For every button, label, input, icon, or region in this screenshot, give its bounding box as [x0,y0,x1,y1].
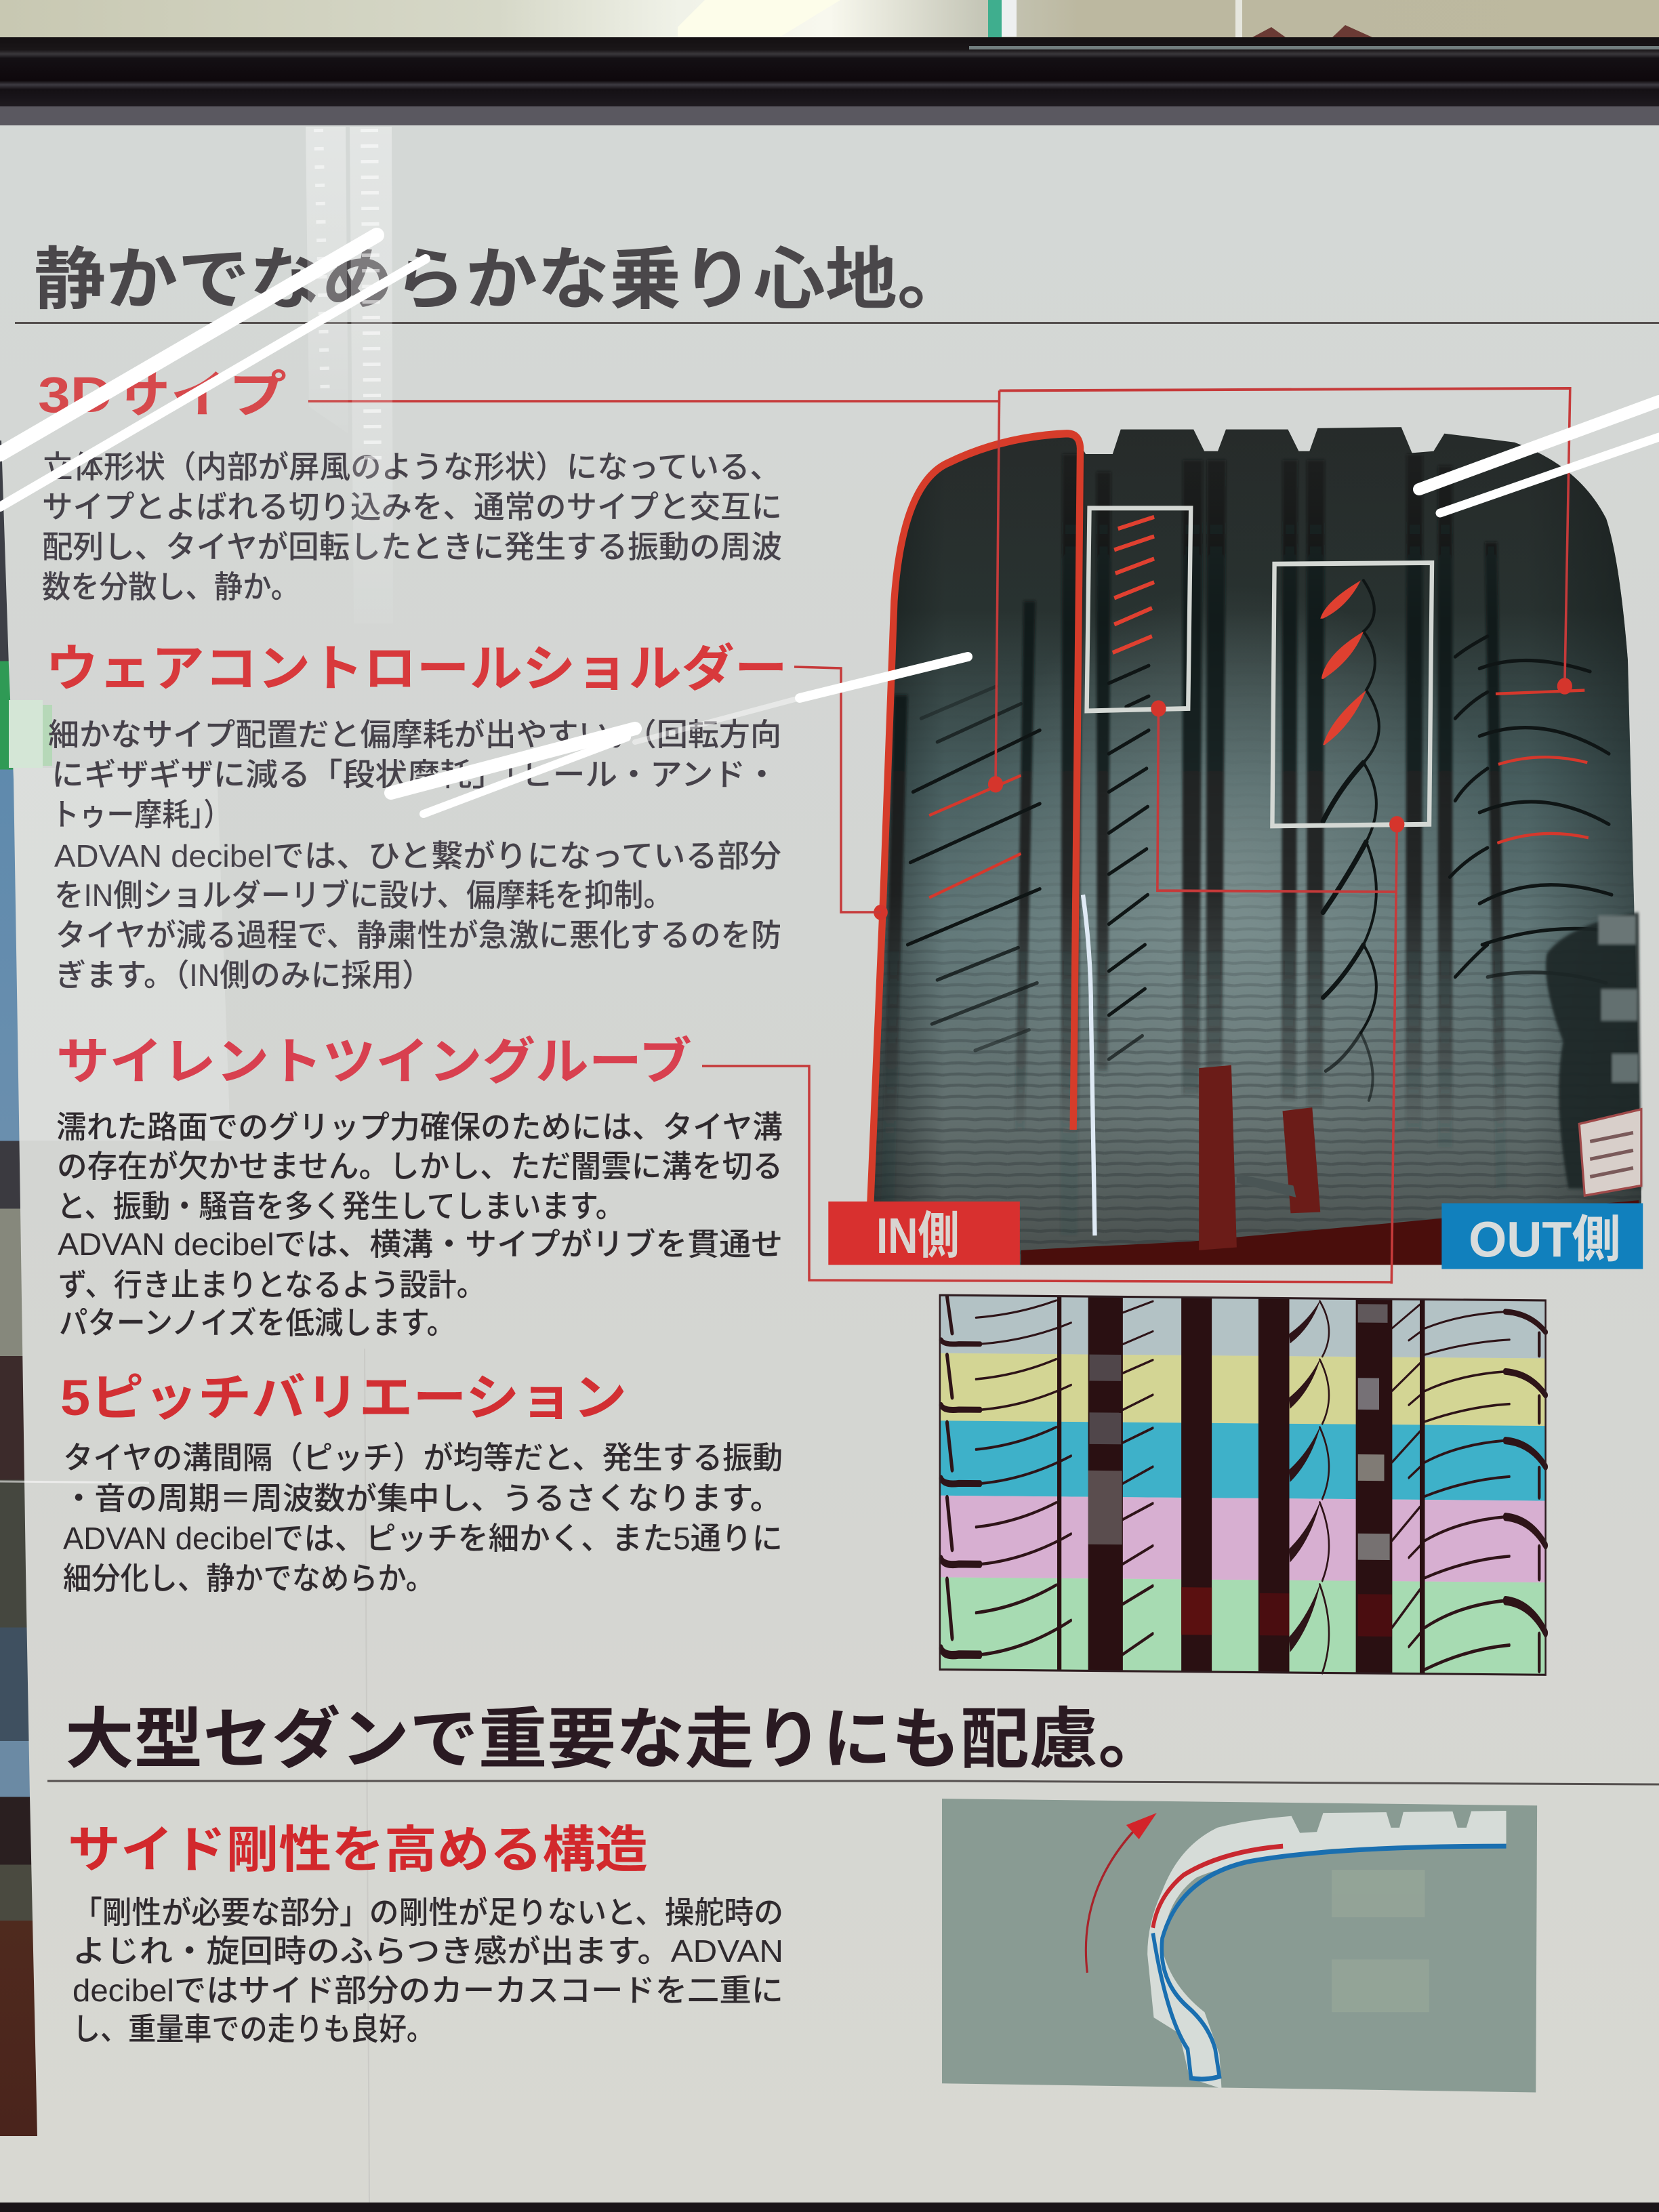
white box: curved rib [1272,562,1432,826]
sipe pattern per band [941,1296,1546,1675]
text: wear control shoulder: タイヤが減る過程で、静粛性が急激に悪化するのを防 [56,918,781,953]
bottom black edge [0,2203,1659,2212]
blue carcass line [1153,1846,1506,2079]
tread notches [1386,1811,1471,1828]
grooves [881,454,1507,1235]
second title: 大型セダンで重要な走りにも配慮。 [65,1702,1167,1776]
text: 5 pitch variation: ・音の周期＝周波数が集中し、うるさくなります。 [63,1481,781,1516]
window reflection on paper [14,768,230,1141]
sipes: shoulder [907,687,1040,1050]
IN side label [828,1202,1020,1265]
red outline of IN shoulder [870,434,1080,1203]
text: side rigidity: し、重量車での走りも良好。 [73,2011,434,2047]
red sipes in box [1113,517,1154,653]
text: silent twin groove: ず、行き止まりとなるよう設計。 [58,1267,485,1303]
title: 静かでなめらかな乗り心地。 [34,242,969,318]
heading: side rigidity: サイド剛性を高める構造 [68,1822,648,1878]
text: 5 pitch variation: ADVAN decibelでは、ピッチを細かく、また5通りに [63,1521,783,1556]
text: wear control shoulder: トゥー摩耗」） [52,797,231,832]
text: wear control shoulder: ADVAN decibelでは、ひと繋がりになっている部分 [54,838,781,874]
red floor and racks [1021,1065,1641,1265]
arrow [1086,1813,1157,1973]
text: silent twin groove: パターンノイズを低減します。 [59,1305,455,1340]
sipes: inner rib [1109,665,1149,1059]
exit sign reflection [9,700,52,768]
wall pole and items [1235,0,1372,38]
tire section [1147,1811,1506,2089]
OUT side label: OUT側 [1469,1212,1621,1268]
red sipes on shoulder [929,775,1021,898]
carcass cross-section diagram [942,1799,1537,2092]
text: wear control shoulder: をIN側ショルダーリブに設け、偏摩耗を抑制。 [54,878,673,913]
IN side label: IN側 [876,1208,960,1265]
text: silent twin groove [56,1109,783,1340]
text: silent twin groove: の存在が欠かせません。しかし、ただ闇雲に溝を切る [57,1149,783,1184]
colored pitch bands [940,1295,1546,1675]
text: side rigidity: よじれ・旋回時のふらつき感が出ます。ADVAN [73,1933,783,1969]
OUT side label [1441,1203,1643,1269]
grey panel [942,1799,1537,2092]
text: 3D sipe: 立体形状（内部が屏風のような形状）になっている、 [42,449,781,485]
red leaf sipes in box [1320,580,1366,745]
text: 3D sipe: サイプとよばれる切り込みを、通常のサイプと交互に [42,489,782,525]
text: wear control shoulder: ぎます。（IN側のみに採用） [56,958,432,993]
glass glare streaks [0,235,1659,814]
heading: wear control shoulder: ウェアコントロールショルダー [45,640,787,697]
text: side rigidity [73,1895,783,2047]
pitch variation chart [940,1295,1546,1675]
leader lines outside the tire [308,401,1393,1282]
red sipes on outer shoulder [1496,691,1589,843]
text: silent twin groove: と、振動・騒音を多く発生してしまいます。 [57,1189,624,1224]
title rule [15,322,1659,324]
dark grooves [1057,1296,1425,1674]
text: side rigidity: decibelではサイド部分のカーカスコードを二重に [73,1973,783,2008]
sipes: curved rib [1323,580,1379,1101]
left dark edge seen past the poster [0,441,37,2136]
green sign behind [988,0,1017,38]
fold line [365,1349,369,2203]
white box: inner rib [1087,508,1191,711]
text: 5 pitch variation: タイヤの溝間隔（ピッチ）が均等だと、発生する振動 [63,1440,783,1475]
text: side rigidity: 「剛性が必要な部分」の剛性が足りないと、操舵時の [73,1895,783,1930]
ceiling light glare [678,0,840,37]
tread stripes [880,885,1641,1265]
text: silent twin groove: ADVAN decibelでは、横溝・サイプがリブを貫通せ [58,1227,783,1262]
sipes: outer shoulder [1450,636,1612,983]
red carcass line [1153,1846,1283,1928]
adhesive tape [306,127,393,623]
leader dots [874,678,1572,920]
pale reflections on panel [1332,1870,1429,2012]
text: wear control shoulder: にギザギザに減る「段状摩耗」「ヒール・アンド・ [52,757,778,792]
faint horizontal reflection [0,1481,149,1483]
tire photo [828,388,1644,1284]
chart border [940,1295,1546,1675]
leader lines [996,388,1570,1284]
background shapes at right of tire [1546,912,1641,1195]
text: wear control shoulder [48,717,781,993]
text: wear control shoulder: 細かなサイプ配置だと偏摩耗が出やすい。（回転方向 [48,717,781,752]
text: 5 pitch variation [63,1440,783,1596]
black frame top [0,37,1659,125]
reflections on grooves [1088,1302,1392,1637]
text: silent twin groove: 濡れた路面でのグリップ力確保のためには、タイヤ溝 [56,1109,783,1145]
text: 3D sipe: 配列し、タイヤが回転したときに発生する振動の周波 [42,529,782,565]
heading: 5 pitch variation: 5ピッチバリエーション [60,1370,627,1426]
heading: 3D sipe: 3Dサイプ [38,367,287,423]
tire body [867,425,1644,1268]
text: 3D sipe [42,449,782,605]
heading: silent twin groove: サイレントツイングルーブ [56,1033,692,1090]
text: 3D sipe: 数を分散し、静か。 [42,569,300,605]
second title rule [47,1781,1659,1784]
text: 5 pitch variation: 細分化し、静かでなめらか。 [63,1561,434,1596]
thin white wire [1083,895,1095,1235]
background: shop wall above the frame [0,0,1659,41]
